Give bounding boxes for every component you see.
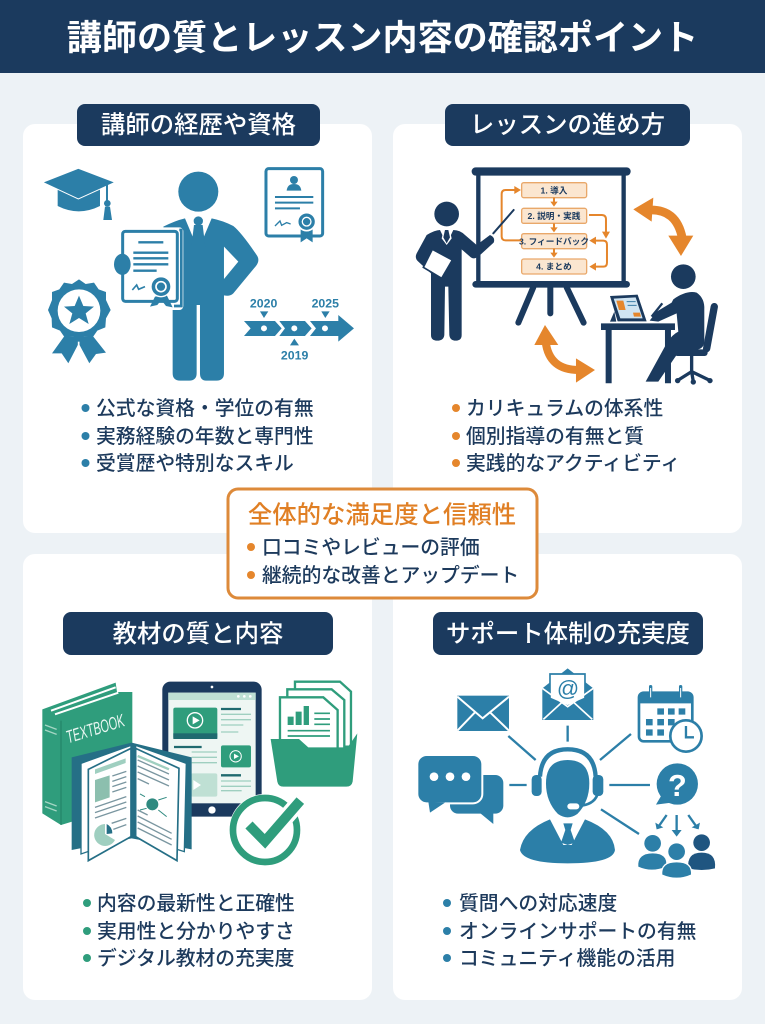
icon: mail	[457, 696, 509, 731]
callout: overall satisfaction	[228, 489, 537, 598]
heading: teaching materials: 教材の質と内容	[113, 621, 283, 648]
chart: career timeline: 2019	[281, 348, 308, 362]
heading: lesson flow: レッスンの進め方	[470, 112, 665, 139]
diagram: lesson steps: 2. 説明・実践	[528, 210, 581, 221]
icon: open envelope: @	[557, 676, 579, 701]
illustration: materials	[42, 682, 357, 866]
heading: teaching materials	[63, 612, 333, 655]
icon: learner at desk	[601, 264, 714, 385]
icon: teacher with pointer	[416, 202, 514, 341]
title banner	[0, 0, 765, 73]
list: lesson checkpoints: 個別指導の有無と質	[466, 426, 644, 448]
list: material checkpoints: デジタル教材の充実度	[97, 947, 295, 970]
heading: support: サポート体制の充実度	[446, 621, 690, 648]
list: support checkpoints: コミュニティ機能の活用	[459, 948, 675, 970]
icon: textbook	[42, 683, 132, 825]
connector lines	[508, 726, 650, 834]
panel: support	[393, 554, 742, 1000]
panel: instructor background	[23, 104, 372, 533]
list: support checkpoints: オンラインサポートの有無	[459, 921, 697, 943]
illustration: support network	[417, 668, 715, 878]
icon: question bubble: ?	[668, 769, 687, 803]
chart: career timeline: 2020	[250, 296, 277, 310]
heading: instructor background: 講師の経歴や資格	[101, 112, 296, 139]
icon: open book	[72, 743, 192, 861]
chart: career timeline: 2025	[312, 296, 339, 310]
chart: career timeline	[244, 296, 354, 362]
illustration: presentation and learner	[416, 167, 714, 385]
icon: textbook: TEXTBOOK	[64, 710, 127, 747]
list: lesson checkpoints: カリキュラムの体系性	[466, 398, 663, 420]
arrow: bottom two-way	[534, 325, 595, 383]
icon: person with suit	[163, 172, 258, 381]
list: instructor checkpoints: 公式な資格・学位の有無	[96, 398, 314, 420]
icon: open envelope	[542, 668, 593, 720]
list: material checkpoints: 実用性と分かりやすさ	[97, 921, 295, 943]
icon: calendar with clock	[639, 687, 702, 752]
diagram: lesson steps: 4. まとめ	[536, 262, 572, 272]
list: support checkpoints	[443, 893, 697, 970]
diagram: lesson steps: 3. フィードバック	[519, 236, 589, 246]
icon: tablet	[162, 682, 262, 817]
icon: award badge with star	[48, 279, 111, 363]
icon: chat bubbles	[417, 755, 503, 824]
title banner: 講師の質とレッスン内容の確認ポイント	[67, 19, 698, 58]
list: lesson checkpoints: 実践的なアクティビティ	[466, 453, 680, 475]
icon: diploma top right	[266, 169, 323, 242]
callout: overall satisfaction: 全体的な満足度と信頼性	[248, 502, 516, 529]
arrow: top two-way	[633, 198, 693, 256]
list: support checkpoints: 質問への対応速度	[459, 893, 617, 915]
icon: folder with documents	[271, 682, 357, 787]
icon: graduation cap	[43, 168, 115, 220]
callout: overall satisfaction: 継続的な改善とアップデート	[262, 564, 519, 587]
panel: teaching materials	[23, 554, 372, 1000]
list: material checkpoints	[83, 893, 295, 970]
icon: check mark	[229, 794, 301, 866]
callout: overall satisfaction: 口コミやレビューの評価	[262, 537, 480, 559]
list: instructor checkpoints	[82, 398, 314, 475]
list: lesson checkpoints	[452, 398, 680, 475]
list: material checkpoints: 内容の最新性と正確性	[97, 893, 295, 915]
panel: lesson flow	[393, 104, 742, 533]
icon: community group	[638, 815, 715, 878]
heading: support	[433, 612, 703, 655]
diagram: lesson steps	[502, 183, 610, 274]
icon: projector screen	[472, 167, 631, 323]
icon: question bubble	[656, 763, 698, 805]
list: instructor checkpoints: 受賞歴や特別なスキル	[96, 453, 294, 475]
diagram: lesson steps: 1. 導入	[541, 184, 568, 195]
list: instructor checkpoints: 実務経験の年数と専門性	[96, 426, 314, 448]
icon: held certificate	[114, 227, 183, 310]
heading: lesson flow	[445, 104, 690, 146]
heading: instructor background	[77, 104, 320, 146]
illustration: instructor with certificates	[43, 168, 354, 381]
icon: support agent with headset	[520, 749, 615, 863]
